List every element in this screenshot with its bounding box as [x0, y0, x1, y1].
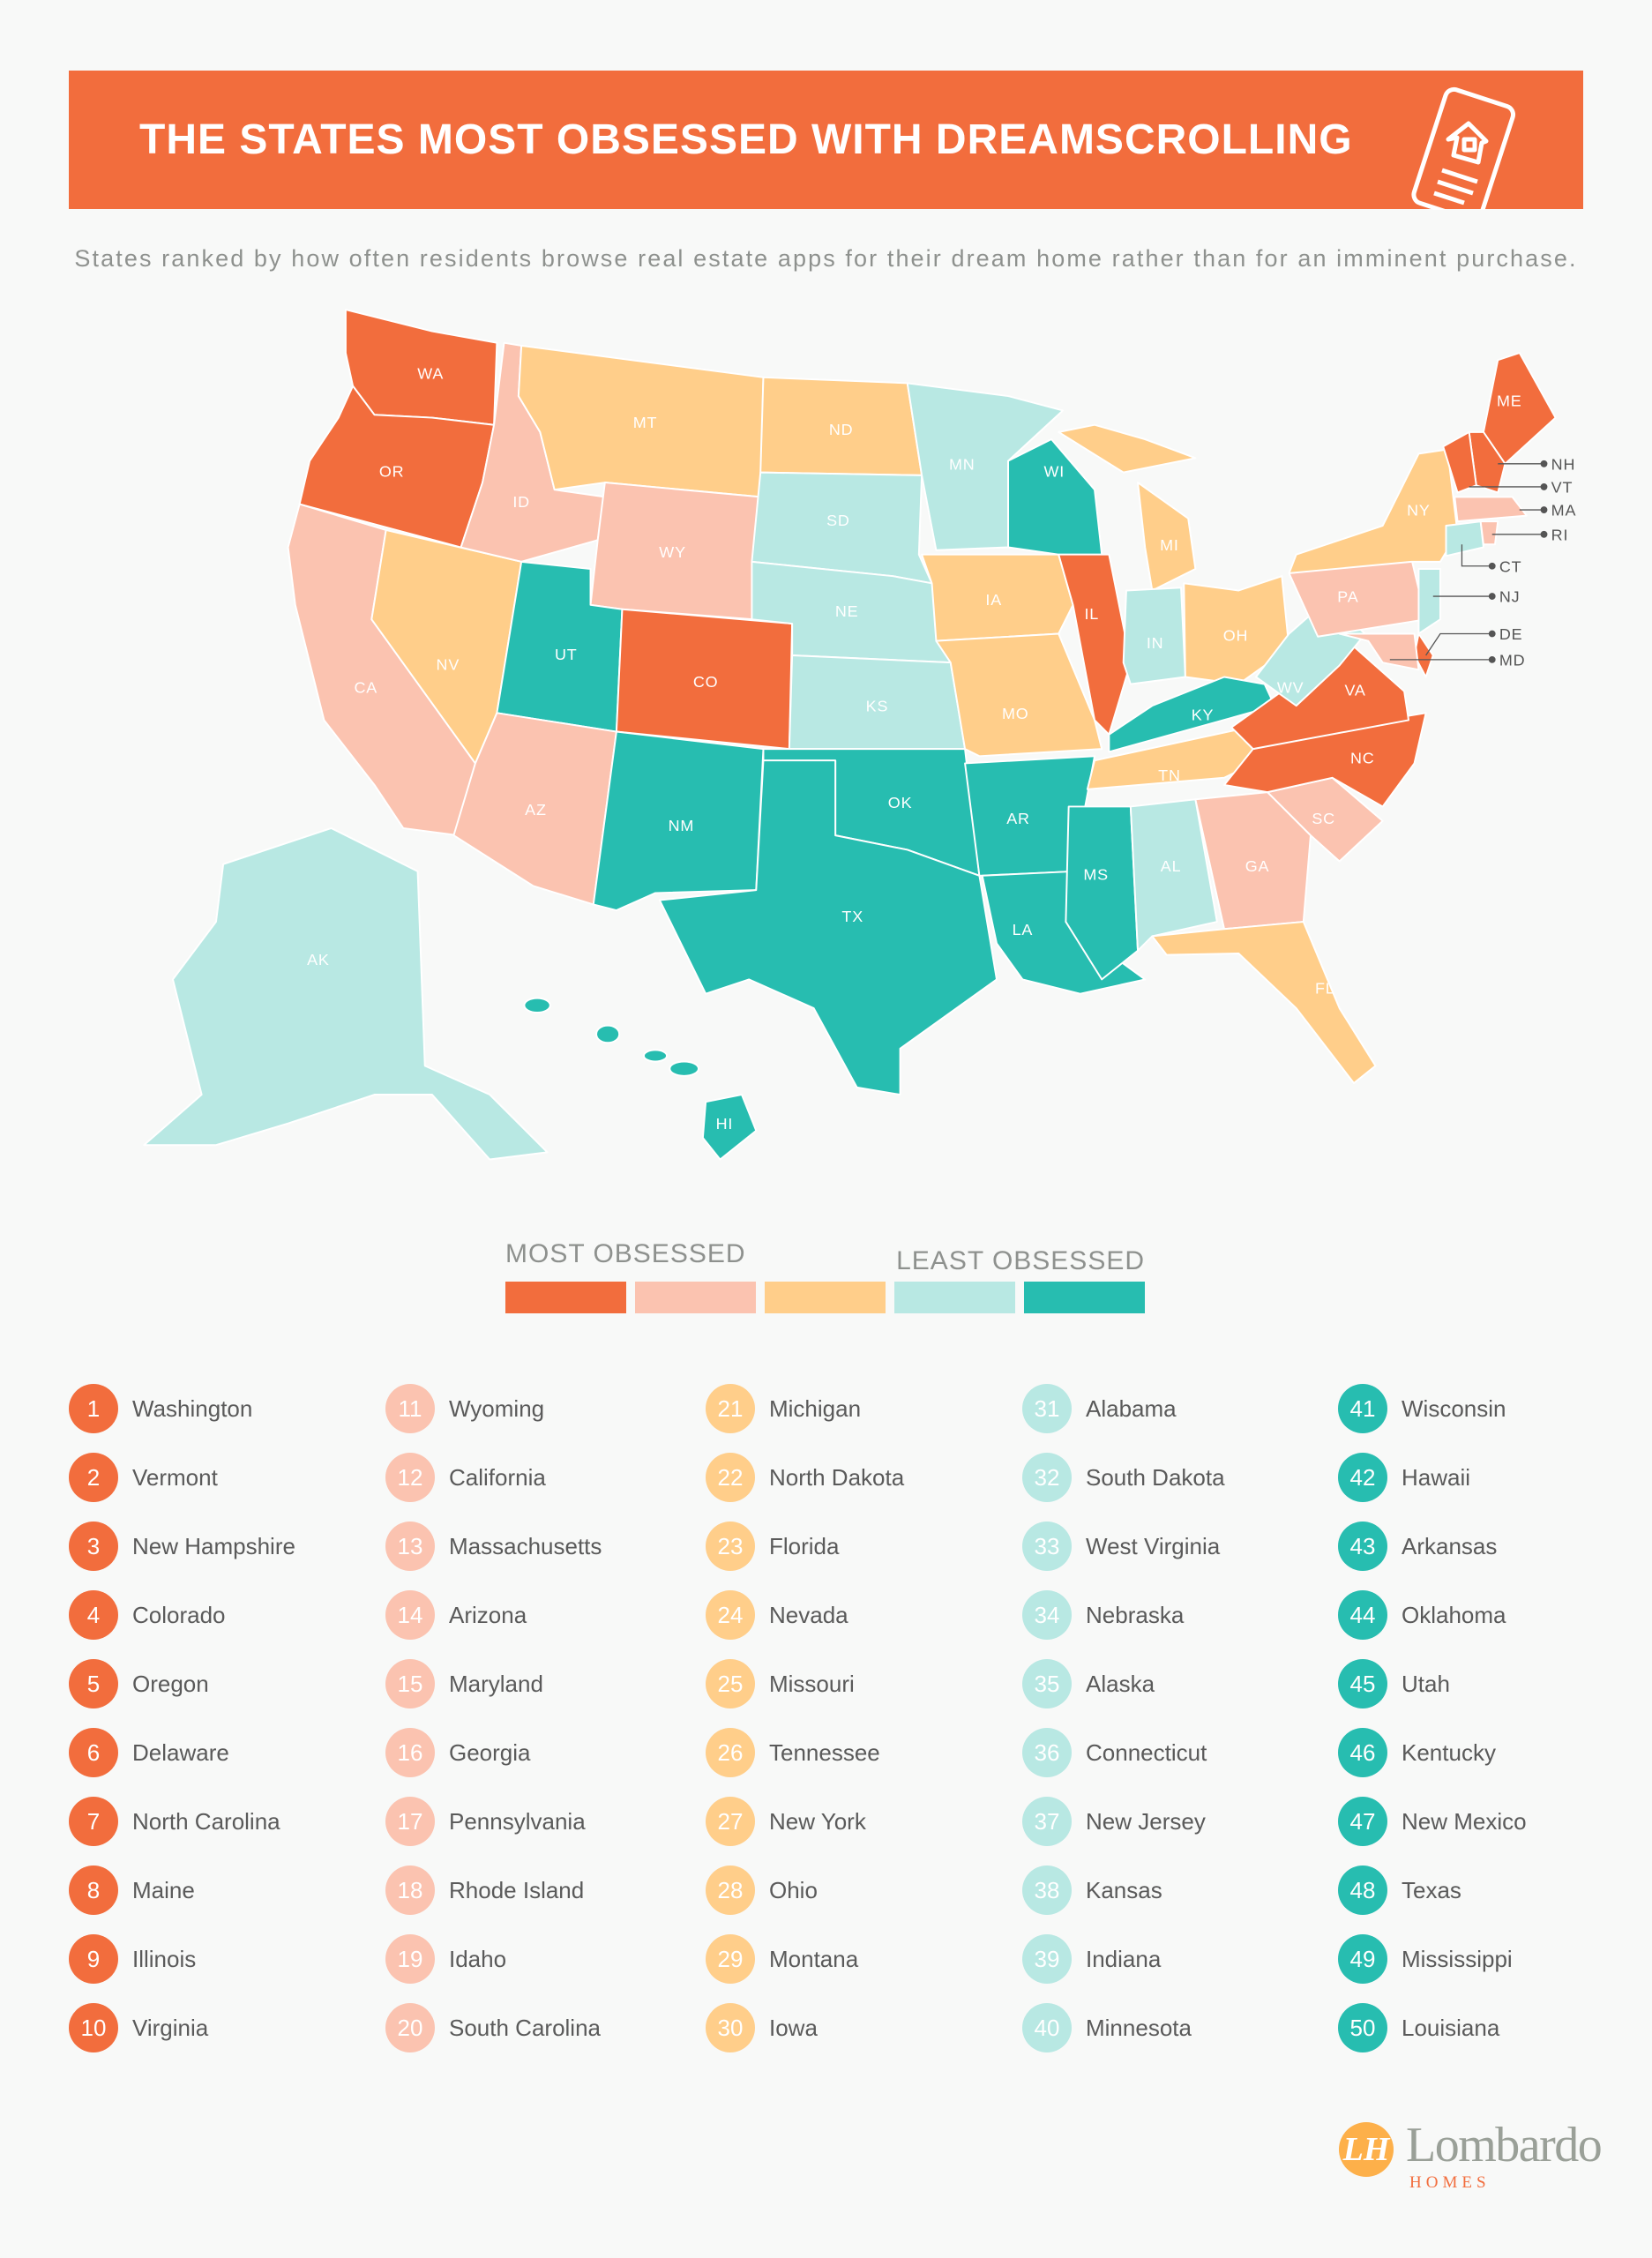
ranking list: Wisconsin — [1402, 1395, 1506, 1422]
map: TN — [1158, 766, 1181, 784]
ranking list: 3 — [87, 1533, 100, 1559]
title: THE STATES MOST OBSESSED WITH DREAMSCROLLING — [139, 116, 1353, 163]
map: MT — [633, 414, 657, 431]
ranking list: Kansas — [1086, 1877, 1162, 1903]
ranking list: Arkansas — [1402, 1533, 1497, 1559]
map: ME — [1497, 392, 1522, 409]
ranking list: 34 — [1035, 1602, 1059, 1628]
ranking list: 1 — [87, 1395, 100, 1422]
ranking list: Oregon — [132, 1671, 209, 1697]
ranking list — [69, 1384, 1527, 2052]
ranking list: Massachusetts — [449, 1533, 602, 1559]
header bar — [69, 71, 1583, 209]
ranking list: 50 — [1350, 2015, 1375, 2041]
ranking list: Ohio — [769, 1877, 818, 1903]
ranking list: 31 — [1035, 1395, 1059, 1422]
ranking list: Georgia — [449, 1739, 531, 1766]
map: SD — [826, 512, 850, 529]
map: KY — [1192, 706, 1214, 723]
ranking list: Florida — [769, 1533, 839, 1559]
map: AR — [1006, 810, 1030, 827]
ranking list: 14 — [398, 1602, 422, 1628]
subtitle: States ranked by how often residents browse real estate apps for their dream home rather than for an imminent purchase. — [74, 245, 1578, 272]
ranking list: Louisiana — [1402, 2015, 1499, 2041]
map — [146, 310, 1576, 1159]
ranking list: 29 — [718, 1946, 743, 1972]
ranking list: 43 — [1350, 1533, 1375, 1559]
ranking list: 25 — [718, 1671, 743, 1697]
legend — [505, 1239, 1145, 1313]
ranking list: Mississippi — [1402, 1946, 1513, 1972]
logo: Lombardo — [1406, 2118, 1601, 2172]
ranking list: 46 — [1350, 1739, 1375, 1766]
ranking list: Rhode Island — [449, 1877, 584, 1903]
ranking list: 38 — [1035, 1877, 1059, 1903]
map: NV — [437, 655, 460, 673]
map: NH — [1551, 455, 1575, 473]
map: VT — [1551, 478, 1573, 496]
ranking list: 5 — [87, 1671, 100, 1697]
ranking list: 15 — [398, 1671, 422, 1697]
map: MI — [1160, 536, 1179, 554]
ranking list: 2 — [87, 1464, 100, 1491]
map: ID — [512, 493, 530, 511]
ranking list: Arizona — [449, 1602, 527, 1628]
icon: phone with house — [1411, 86, 1515, 209]
map: NJ — [1499, 588, 1520, 606]
logo: HOMES — [1409, 2173, 1491, 2192]
ranking list: New York — [769, 1808, 866, 1835]
ranking list: New Hampshire — [132, 1533, 295, 1559]
ranking list: Kentucky — [1402, 1739, 1496, 1766]
legend: MOST OBSESSED — [505, 1239, 746, 1268]
map: IN — [1147, 634, 1163, 652]
ranking list: 7 — [87, 1808, 100, 1835]
ranking list: 10 — [81, 2015, 106, 2041]
ranking list: California — [449, 1464, 546, 1491]
legend: LEAST OBSESSED — [896, 1246, 1145, 1275]
ranking list: 41 — [1350, 1395, 1375, 1422]
map: IL — [1084, 605, 1099, 623]
ranking list: 32 — [1035, 1464, 1059, 1491]
ranking list: 18 — [398, 1877, 422, 1903]
ranking list: 9 — [87, 1946, 100, 1972]
ranking list: 21 — [718, 1395, 743, 1422]
ranking list: New Jersey — [1086, 1808, 1206, 1835]
ranking list: South Dakota — [1086, 1464, 1225, 1491]
logo: LH — [1343, 2131, 1389, 2168]
ranking list: 6 — [87, 1739, 100, 1766]
ranking list: 22 — [718, 1464, 743, 1491]
map: FL — [1315, 980, 1335, 998]
ranking list: 47 — [1350, 1808, 1375, 1835]
ranking list: 37 — [1035, 1808, 1059, 1835]
ranking list: Montana — [769, 1946, 858, 1972]
ranking list: Hawaii — [1402, 1464, 1470, 1491]
ranking list: 19 — [398, 1946, 422, 1972]
map: HI — [716, 1115, 733, 1133]
ranking list: 44 — [1350, 1602, 1375, 1628]
map: CA — [354, 678, 377, 696]
ranking list: Connecticut — [1086, 1739, 1207, 1766]
ranking list: 49 — [1350, 1946, 1375, 1972]
ranking list: Tennessee — [769, 1739, 880, 1766]
map: MN — [949, 455, 976, 473]
ranking list: 12 — [398, 1464, 422, 1491]
ranking list: Idaho — [449, 1946, 506, 1972]
ranking list: Michigan — [769, 1395, 861, 1422]
map: OR — [379, 463, 404, 481]
ranking list: Maine — [132, 1877, 195, 1903]
map: KS — [866, 698, 888, 715]
logo — [1339, 2118, 1601, 2192]
ranking list: 26 — [718, 1739, 743, 1766]
map: ND — [829, 421, 853, 438]
ranking list: North Dakota — [769, 1464, 904, 1491]
map: NM — [669, 817, 694, 834]
ranking list: Washington — [132, 1395, 252, 1422]
map: RI — [1551, 526, 1568, 543]
ranking list: Virginia — [132, 2015, 208, 2041]
map: AL — [1161, 857, 1181, 875]
map: WY — [659, 543, 686, 561]
ranking list: Utah — [1402, 1671, 1450, 1697]
ranking list: South Carolina — [449, 2015, 601, 2041]
ranking list: 30 — [718, 2015, 743, 2041]
ranking list: 8 — [87, 1877, 100, 1903]
ranking list: Missouri — [769, 1671, 855, 1697]
map: IA — [985, 591, 1002, 609]
ranking list: 33 — [1035, 1533, 1059, 1559]
map: WI — [1044, 463, 1065, 481]
ranking list: North Carolina — [132, 1808, 280, 1835]
ranking list: 39 — [1035, 1946, 1059, 1972]
ranking list: Oklahoma — [1402, 1602, 1506, 1628]
ranking list: Illinois — [132, 1946, 196, 1972]
map: CO — [693, 673, 718, 691]
ranking list: 11 — [399, 1395, 422, 1422]
ranking list: Maryland — [449, 1671, 543, 1697]
ranking list: Nevada — [769, 1602, 848, 1628]
map: WA — [417, 364, 444, 382]
ranking list: Alabama — [1086, 1395, 1177, 1422]
map: GA — [1245, 857, 1269, 875]
ranking list: Nebraska — [1086, 1602, 1184, 1628]
map: MA — [1551, 502, 1576, 520]
ranking list: 17 — [398, 1808, 422, 1835]
ranking list: 36 — [1035, 1739, 1059, 1766]
ranking list: Alaska — [1086, 1671, 1155, 1697]
ranking list: Iowa — [769, 2015, 818, 2041]
map: MS — [1083, 866, 1109, 884]
ranking list: 24 — [718, 1602, 743, 1628]
ranking list: Wyoming — [449, 1395, 544, 1422]
ranking list: Minnesota — [1086, 2015, 1192, 2041]
ranking list: 20 — [398, 2015, 422, 2041]
map: AZ — [525, 801, 547, 819]
map: OK — [888, 794, 912, 811]
ranking list: 45 — [1350, 1671, 1375, 1697]
map: VA — [1344, 682, 1366, 699]
ranking list: Texas — [1402, 1877, 1461, 1903]
map: NY — [1407, 502, 1431, 520]
ranking list: 23 — [718, 1533, 743, 1559]
ranking list: 28 — [718, 1877, 743, 1903]
ranking list: 27 — [718, 1808, 743, 1835]
map: NE — [835, 602, 858, 620]
map: LA — [1013, 921, 1033, 938]
ranking list: Delaware — [132, 1739, 229, 1766]
map: DE — [1499, 625, 1522, 643]
map: MD — [1499, 651, 1525, 669]
map: NC — [1350, 749, 1375, 766]
ranking list: Colorado — [132, 1602, 226, 1628]
map: MO — [1002, 705, 1029, 722]
ranking list: New Mexico — [1402, 1808, 1527, 1835]
ranking list: 35 — [1035, 1671, 1059, 1697]
map: UT — [555, 646, 578, 663]
map: PA — [1337, 588, 1359, 606]
ranking list: Indiana — [1086, 1946, 1161, 1972]
ranking list: 48 — [1350, 1877, 1375, 1903]
ranking list: 42 — [1350, 1464, 1375, 1491]
ranking list: 13 — [398, 1533, 422, 1559]
ranking list: West Virginia — [1086, 1533, 1220, 1559]
map: CT — [1499, 557, 1521, 575]
ranking list: 4 — [87, 1602, 100, 1628]
ranking list: Vermont — [132, 1464, 218, 1491]
ranking list: 16 — [398, 1739, 422, 1766]
ranking list: Pennsylvania — [449, 1808, 586, 1835]
ranking list: 40 — [1035, 2015, 1059, 2041]
map: WV — [1277, 678, 1304, 696]
map: OH — [1223, 627, 1248, 645]
map: TX — [841, 908, 863, 925]
map: SC — [1312, 810, 1335, 827]
map: AK — [307, 951, 330, 968]
